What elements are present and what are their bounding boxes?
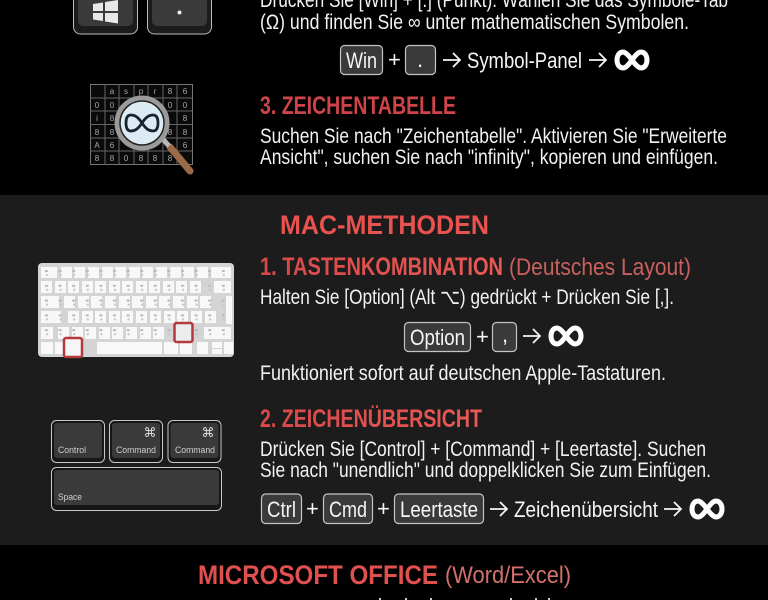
character grid: 6 <box>110 141 115 150</box>
text: Windows symbol panel description <box>260 0 728 34</box>
character grid: 0 <box>110 101 115 110</box>
formula: Ctrl + Cmd + Leertaste: + <box>306 496 319 521</box>
character grid: 0 <box>124 154 129 163</box>
key: control <box>52 420 104 462</box>
character grid: 8 <box>110 154 115 163</box>
formula: Ctrl + Cmd + Leertaste: Leertaste <box>400 497 478 522</box>
character grid: 8 <box>139 154 144 163</box>
character grid: A <box>94 141 100 150</box>
magnifier lens <box>117 98 167 148</box>
formula: Win + . to symbol panel: + <box>388 47 401 72</box>
icon: Apple keyboard with highlighted keys <box>38 263 234 357</box>
text: Windows symbol panel description: (Ω) und finden Sie ∞ unter mathematischen Symbolen. <box>260 11 689 34</box>
character grid: 8 <box>95 154 100 163</box>
heading: Mac-Methoden: MAC-METHODEN <box>280 210 489 240</box>
character grid: p <box>139 87 144 96</box>
character grid: 8 <box>110 114 115 123</box>
key: command: ⌘ <box>144 426 156 441</box>
formula: Win + . to symbol panel <box>340 46 647 74</box>
character grid: a <box>110 87 115 96</box>
character grid: 6 <box>183 141 188 150</box>
formula: Win + . to symbol panel: Win <box>346 48 377 73</box>
icon: Windows and period keys <box>74 0 212 34</box>
icon: control command space keys <box>52 420 222 510</box>
character grid: s <box>124 87 128 96</box>
character grid: i <box>96 114 98 123</box>
formula: Option + comma: Option <box>410 325 465 350</box>
text: Zeichenübersicht description <box>260 438 711 482</box>
key: space: Space <box>58 492 82 502</box>
formula: Ctrl + Cmd + Leertaste: Zeichenübersicht <box>514 497 658 522</box>
key: command: Command <box>116 445 156 455</box>
heading: Microsoft Office: MICROSOFT OFFICE <box>198 560 438 590</box>
character grid: 8 <box>95 128 100 137</box>
heading suffix: Deutsches Layout: (Deutsches Layout) <box>509 254 691 281</box>
character grid: 6 <box>183 87 188 96</box>
text: option shortcut instruction: Halten Sie [Option] (Alt ⌥) gedrückt + Drücken Sie [,]. <box>260 286 674 309</box>
heading: 1. Tastenkombination: 1. TASTENKOMBINATION <box>260 253 503 281</box>
highlighted comma key <box>174 323 192 342</box>
character grid: 8 <box>168 87 173 96</box>
character grid: 0 <box>168 101 173 110</box>
character grid: 8 <box>183 128 188 137</box>
formula: Ctrl + Cmd + Leertaste <box>262 494 722 524</box>
heading: 3. Zeichentabelle: 3. ZEICHENTABELLE <box>260 92 456 120</box>
formula: Ctrl + Cmd + Leertaste: Ctrl <box>267 497 296 522</box>
heading: Microsoft Office: (Word/Excel) <box>445 562 571 589</box>
formula: Option + comma: , <box>502 322 508 347</box>
text: Zeichentabelle description <box>260 125 727 169</box>
character grid: 0 <box>95 101 100 110</box>
formula: Win + . to symbol panel: . <box>417 47 423 72</box>
key: command: Command <box>175 445 215 455</box>
character grid: r <box>154 87 157 96</box>
formula: Ctrl + Cmd + Leertaste: + <box>377 496 390 521</box>
character grid: 8 <box>168 128 173 137</box>
highlighted option key <box>64 338 82 357</box>
formula: Ctrl + Cmd + Leertaste: Cmd <box>329 497 367 522</box>
key: command <box>168 420 221 462</box>
character grid: 8 <box>110 128 115 137</box>
text: works on German Apple keyboards: Funktioniert sofort auf deutschen Apple-Tastaturen. <box>260 362 666 385</box>
character grid: 0 <box>183 101 188 110</box>
icon: character table with magnifier <box>90 84 193 171</box>
heading: 2. Zeichenübersicht: 2. ZEICHENÜBERSICHT <box>260 404 482 433</box>
formula: Win + . to symbol panel: Symbol-Panel <box>467 48 582 73</box>
formula: Option + comma <box>404 322 581 352</box>
character grid: 8 <box>153 154 158 163</box>
character grid <box>90 84 193 165</box>
character grid: 8 <box>168 154 173 163</box>
key: space <box>52 468 222 510</box>
key: command <box>110 420 162 462</box>
character grid: 8 <box>183 114 188 123</box>
magnifier handle <box>170 147 190 171</box>
formula: Option + comma: + <box>476 324 489 349</box>
infinity symbol in lens <box>126 115 158 131</box>
key: command: ⌘ <box>202 426 214 441</box>
key: control: Control <box>58 445 86 455</box>
mac section background <box>0 195 768 545</box>
